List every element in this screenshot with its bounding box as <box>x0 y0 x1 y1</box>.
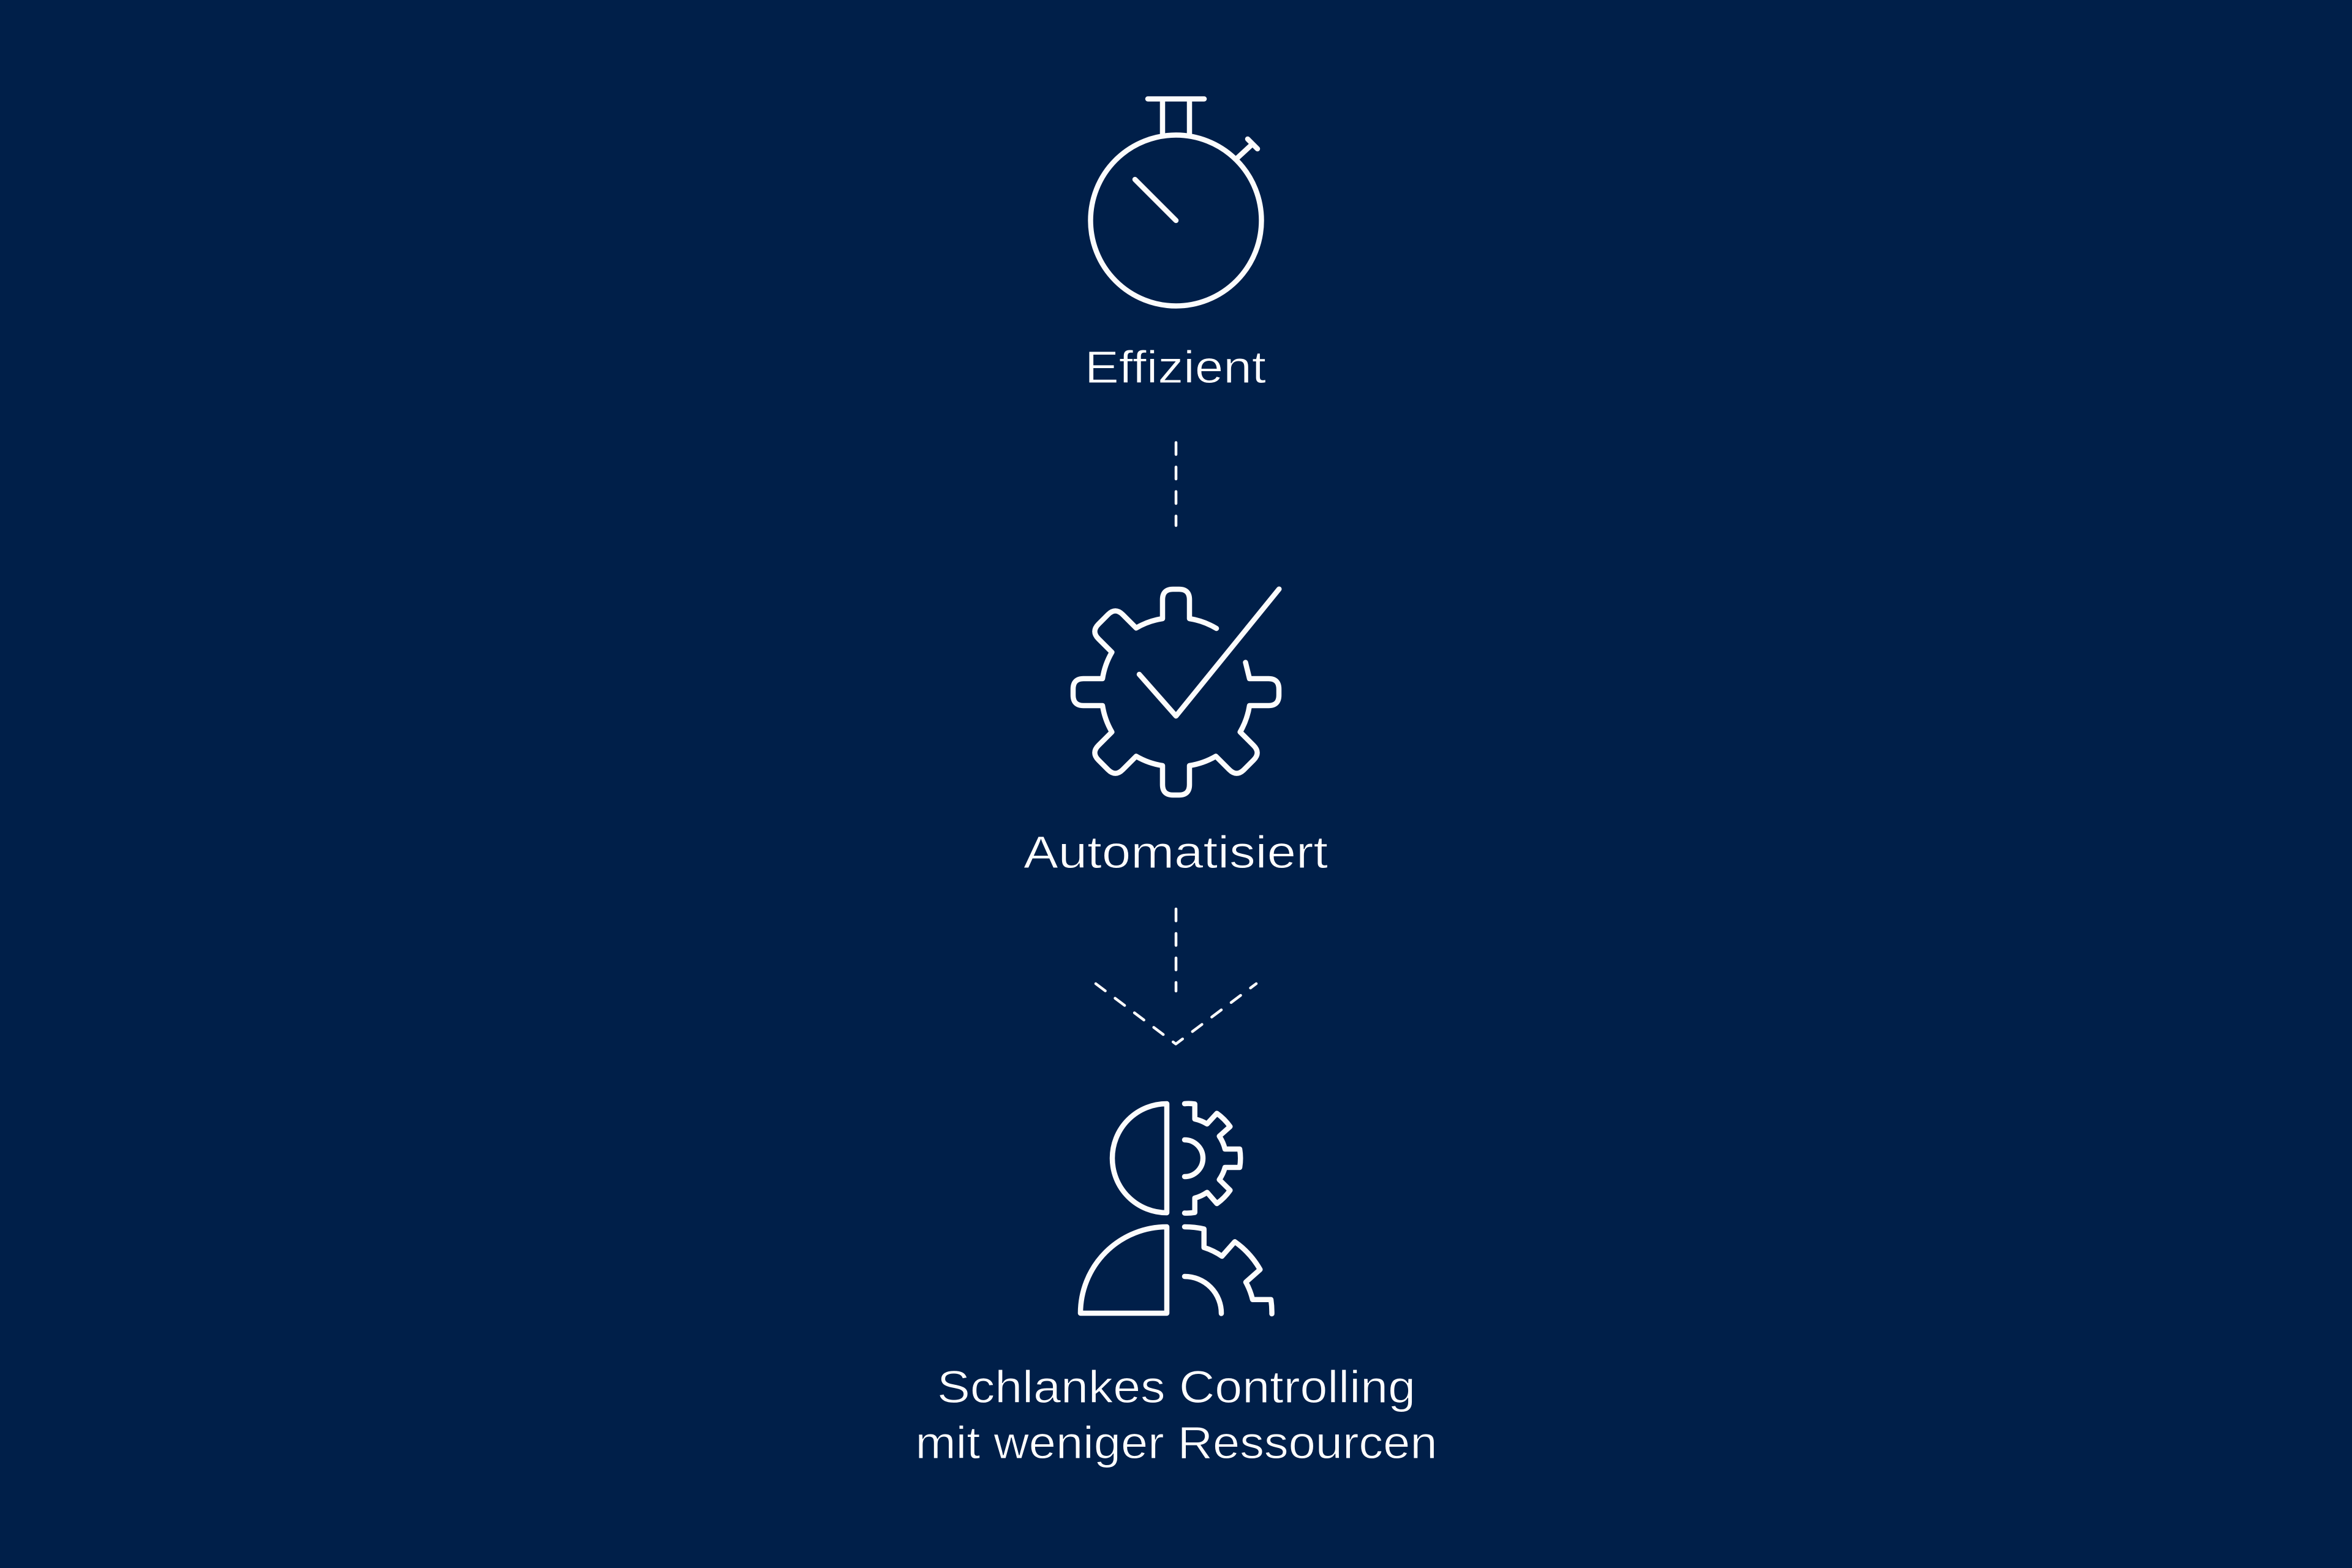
upper gear half <box>1185 1104 1240 1213</box>
label: Automatisiert: Automatisiert <box>1023 827 1329 878</box>
lower gear half <box>1185 1227 1272 1314</box>
dashed connector 2 <box>1175 909 1177 991</box>
icon: half person half gear <box>1080 1104 1272 1314</box>
icon: stopwatch <box>1090 99 1262 306</box>
label: Schlankes Controlling mit weniger Ressourcen: mit weniger Ressourcen <box>915 1417 1437 1468</box>
label: Schlankes Controlling mit weniger Ressourcen: Schlankes Controlling <box>937 1362 1415 1412</box>
dashed arrowhead <box>1096 984 1256 1044</box>
label: Effizient: Effizient <box>1085 342 1266 393</box>
body half <box>1080 1227 1167 1313</box>
dashed connector 1 <box>1175 442 1177 526</box>
icon: gear with checkmark <box>1073 589 1279 795</box>
head half <box>1112 1104 1167 1213</box>
label: Schlankes Controlling mit weniger Ressourcen <box>915 1362 1437 1468</box>
